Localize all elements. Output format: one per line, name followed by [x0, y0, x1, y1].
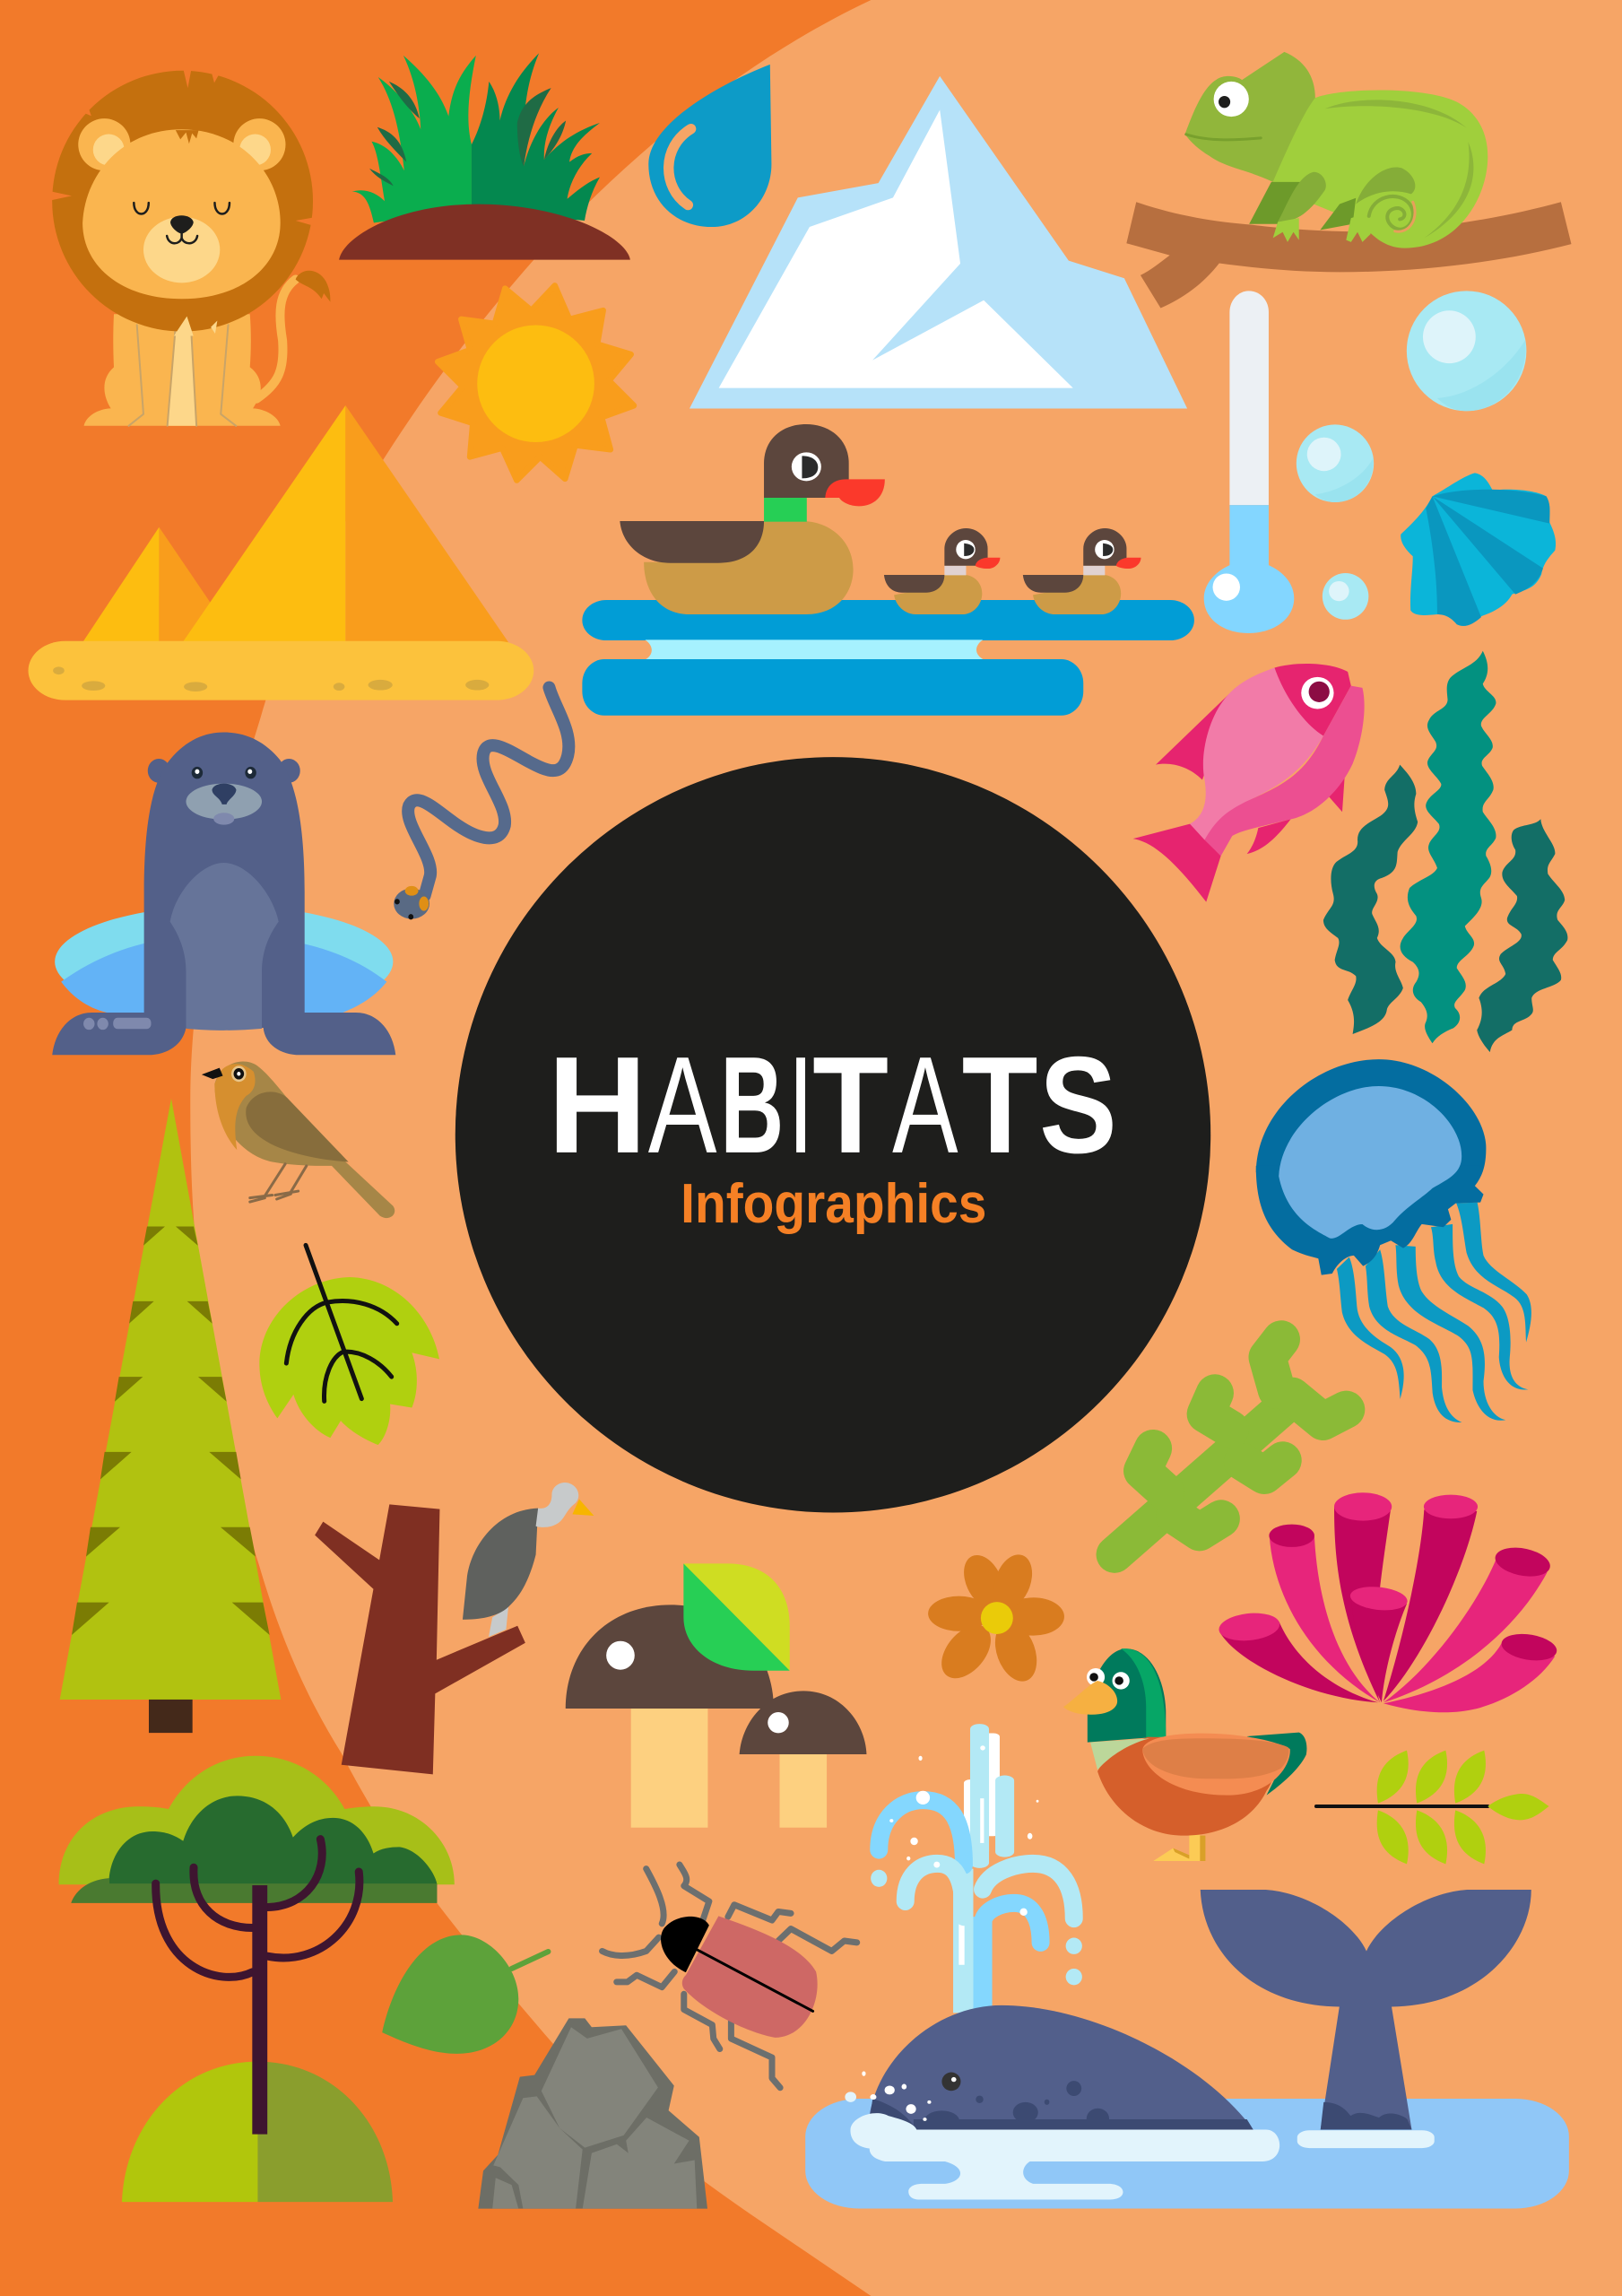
icon: green leaf: [382, 1935, 548, 2054]
icon: snake: [394, 688, 568, 919]
icon: seal in pool: [52, 733, 395, 1055]
title: A: [648, 1028, 717, 1182]
central circle: [455, 757, 1210, 1513]
icon: ducks on water: [582, 424, 1194, 716]
icon: jellyfish: [1256, 1059, 1531, 1422]
icon: fir tree: [60, 1099, 281, 1733]
title: H: [548, 1028, 647, 1182]
icon: fountain: [871, 1724, 1082, 2013]
icon: pyramids on sand: [29, 405, 533, 700]
icon: fish: [1133, 664, 1365, 902]
icon: acacia tree: [59, 1756, 455, 2202]
icon: water drop: [648, 65, 771, 227]
icon: chameleon on branch: [1126, 52, 1571, 309]
title: T: [962, 1028, 1038, 1182]
icon: beetle: [603, 1865, 857, 2088]
icon: whale and tail in water: [805, 1890, 1569, 2208]
title: B: [720, 1028, 784, 1182]
icon: iceberg: [690, 76, 1187, 409]
title: S: [1039, 1028, 1117, 1182]
icon: seaweed: [1323, 651, 1567, 1052]
title: I: [787, 1028, 814, 1182]
icon: robin: [202, 1062, 395, 1218]
subtitle: Infographics: [681, 1173, 986, 1235]
icon: cactus: [1115, 1339, 1346, 1554]
icon: mallard: [1063, 1648, 1306, 1861]
icon: bare tree with vulture: [315, 1483, 594, 1774]
icon: mushrooms with leaf: [566, 1563, 866, 1828]
icon: coral: [1217, 1492, 1560, 1712]
icon: leaf with veins: [259, 1245, 439, 1445]
title: T: [812, 1028, 889, 1182]
icon: flower: [928, 1549, 1064, 1688]
icon: shell: [1401, 473, 1556, 626]
title: A: [892, 1028, 958, 1182]
icon: rock: [478, 2018, 707, 2209]
icon: thermometer: [1204, 291, 1294, 633]
icon: grass mound: [339, 53, 630, 260]
icon: sun: [438, 285, 634, 481]
icon: sprig: [1316, 1751, 1548, 1864]
icon: bubbles: [1297, 291, 1526, 620]
icon: lion: [51, 70, 330, 426]
